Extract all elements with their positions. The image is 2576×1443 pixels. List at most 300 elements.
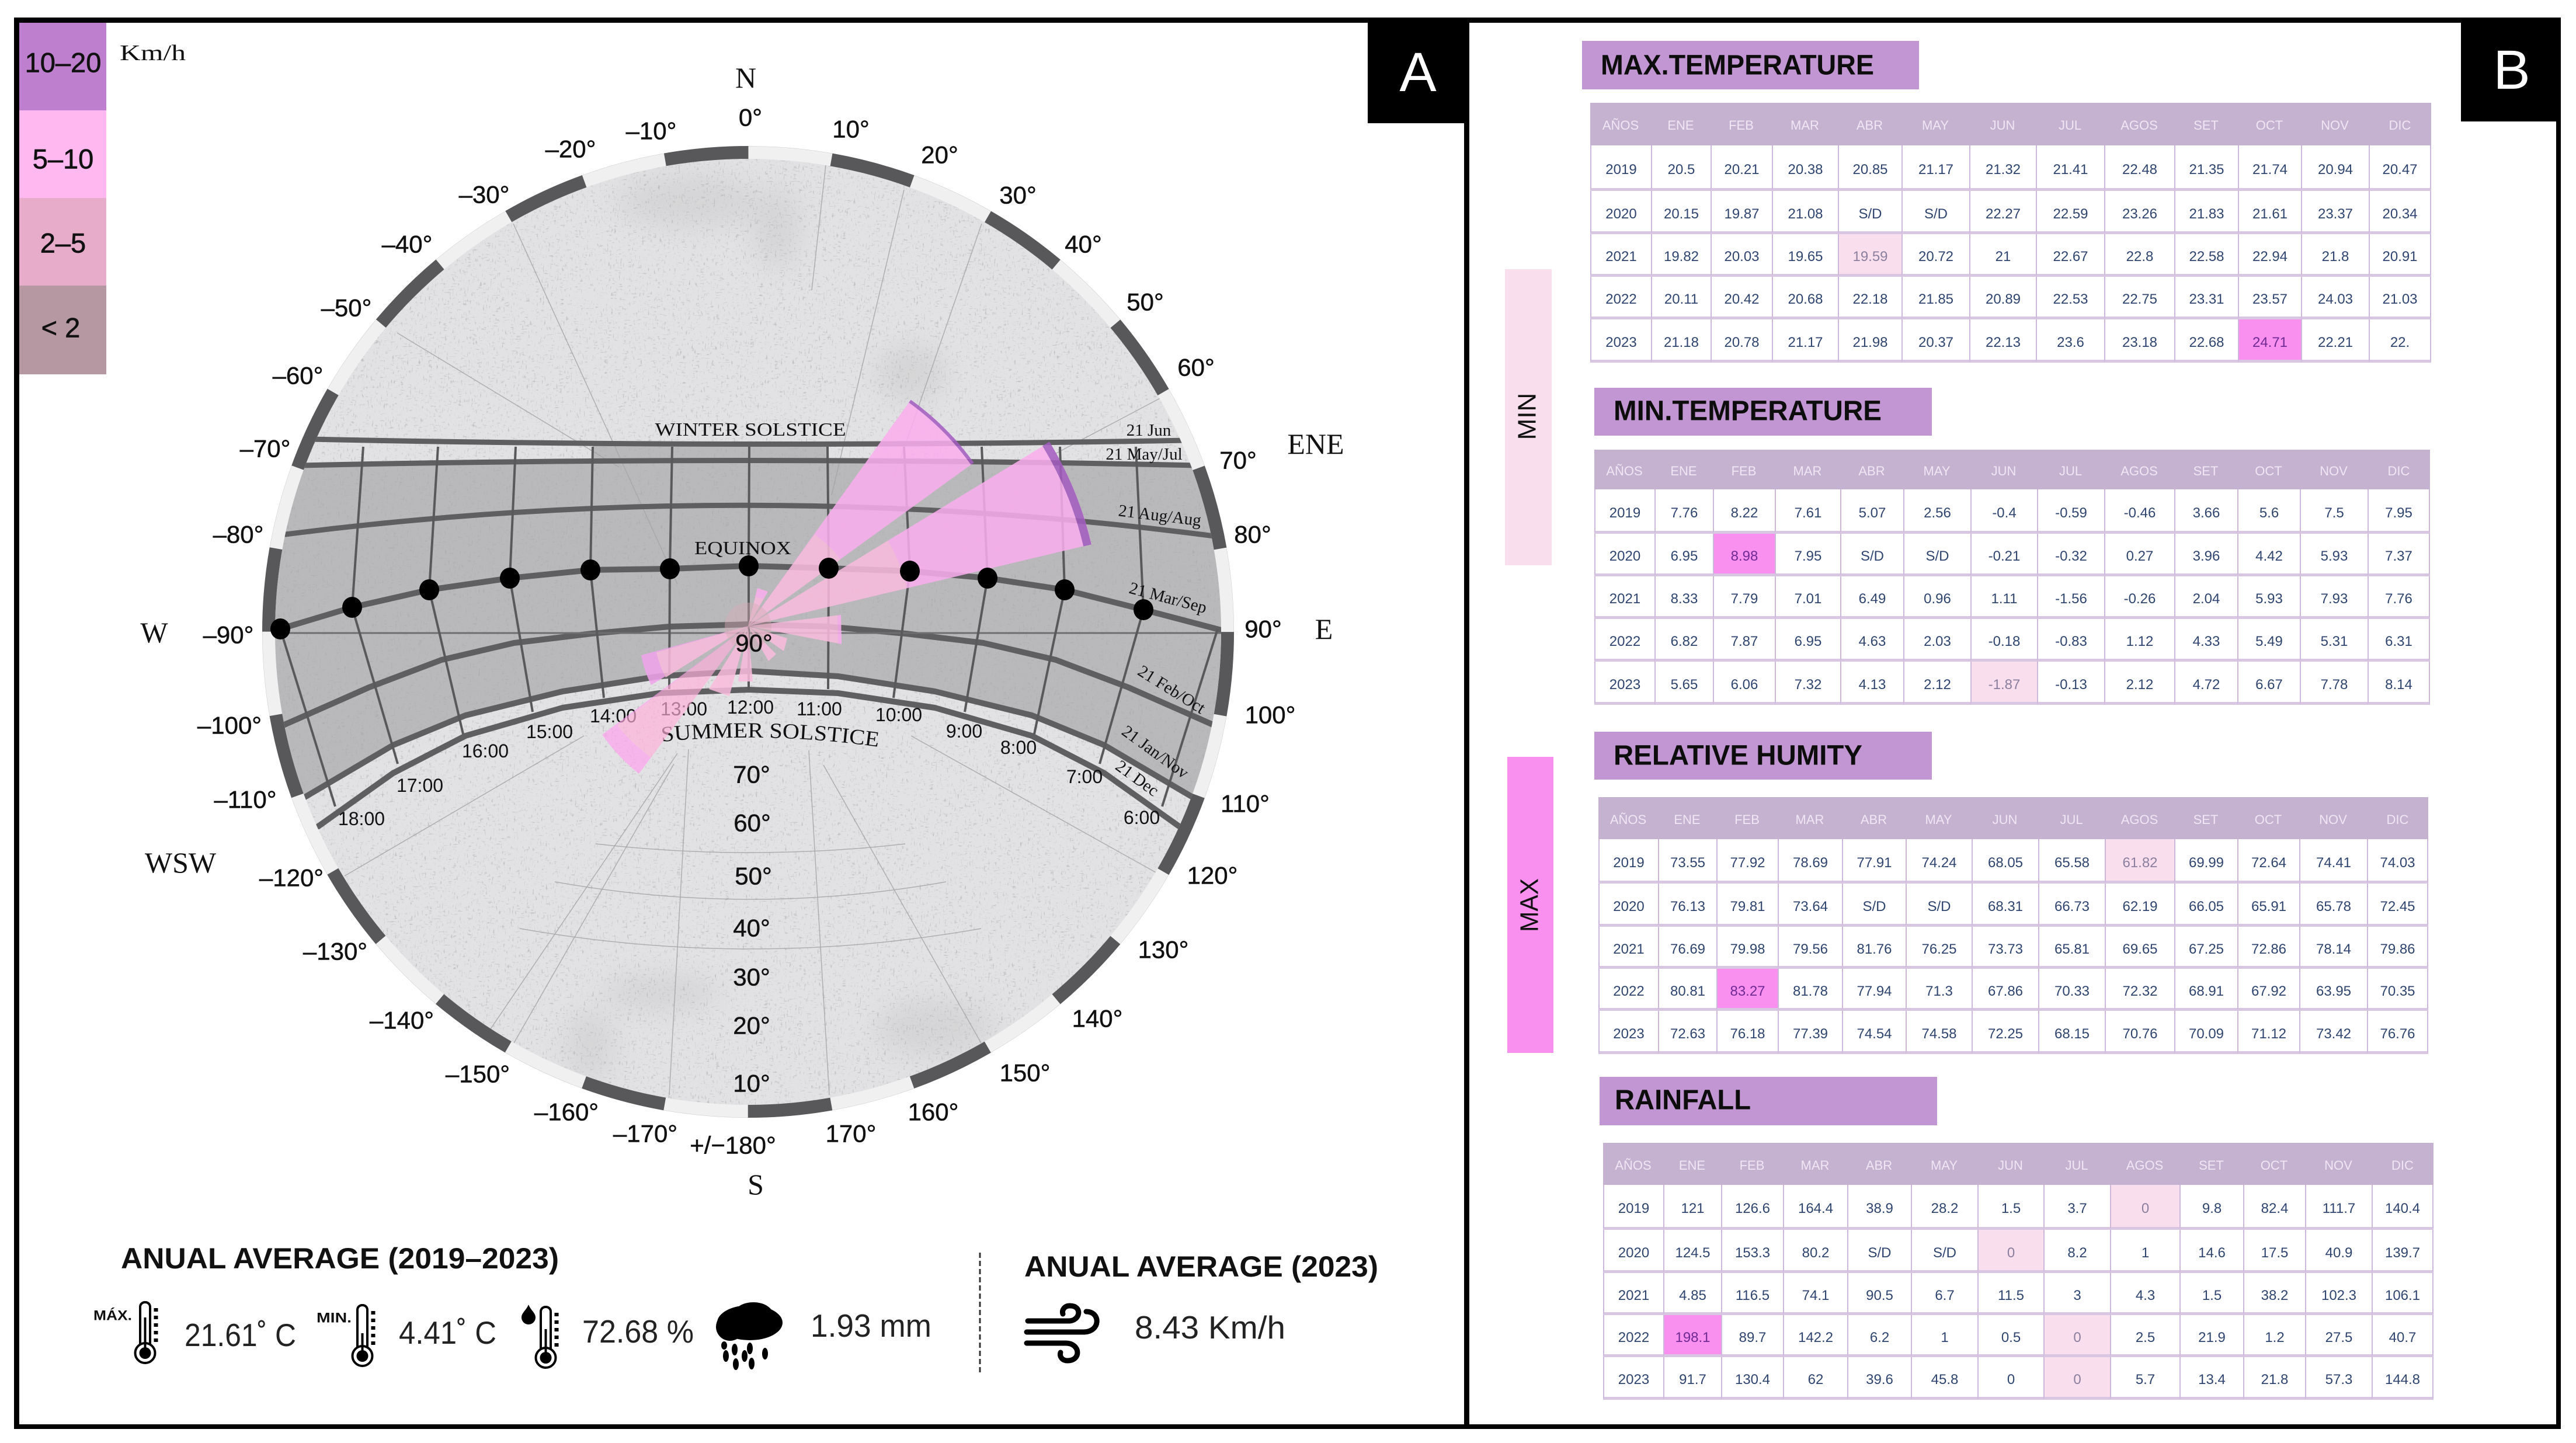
- table: min temperature: MAR: [1793, 464, 1821, 478]
- table: relative humidity: 70.76: [2122, 1025, 2158, 1042]
- table: min temperature: 5.93: [2321, 548, 2348, 564]
- map speckle: [257, 140, 1250, 1133]
- table: rainfall: 1.5: [2202, 1287, 2222, 1303]
- table: relative humidity: 74.24: [1921, 855, 1957, 870]
- degree ring: [193, 77, 1303, 1187]
- side strip: MIN: MIN: [1513, 393, 1542, 440]
- side strip: MAX: [1507, 757, 1553, 1053]
- azimuth labels: 20°: [921, 141, 958, 168]
- table: min temperature: JUL: [2059, 464, 2082, 478]
- azimuth labels: –20°: [545, 135, 596, 162]
- altitude labels: 70°: [733, 760, 770, 788]
- wind speed legend: 5–10: [33, 144, 93, 174]
- hour labels: 8:00: [1000, 737, 1037, 758]
- table: max temperature: 21.35: [2189, 161, 2224, 178]
- table: rainfall: 21.8: [2261, 1372, 2288, 1388]
- altitude labels: 20°: [733, 1011, 770, 1039]
- table: min temperature: 7.76: [1671, 505, 1698, 521]
- table: min temperature: 7.76: [2385, 591, 2412, 607]
- table: relative humidity: 76.69: [1670, 941, 1705, 957]
- table: rainfall: 28.2: [1931, 1201, 1958, 1216]
- wedge: NE upper: [748, 401, 972, 626]
- azimuth labels: 0°: [739, 104, 762, 131]
- table: min temperature: 7.78: [2321, 676, 2348, 693]
- wedge: ENE long: [748, 442, 1091, 626]
- table: min temperature: 6.95: [1795, 634, 1821, 649]
- table: relative humidity: 74.03: [2380, 855, 2415, 870]
- table: min temperature: AGOS: [2120, 464, 2158, 478]
- solstice and equinox labels: EQUINOX: [694, 537, 791, 558]
- table: relative humidity: 66.73: [2054, 898, 2090, 915]
- azimuth labels: 150°: [1000, 1059, 1050, 1086]
- table: relative humidity: 77.92: [1730, 855, 1765, 870]
- azimuth labels: –130°: [303, 938, 367, 965]
- table: min temperature: S/D: [1925, 548, 1949, 564]
- table: max temperature: 21.61: [2252, 206, 2288, 222]
- icon: rain cloud: [716, 1302, 783, 1370]
- hour labels: 12:00: [727, 697, 774, 718]
- table: relative humidity: 63.95: [2316, 983, 2351, 999]
- compass labels: E: [1315, 613, 1333, 645]
- table: max temperature: 21.18: [1664, 334, 1699, 350]
- table: rainfall: 1.2: [2265, 1329, 2285, 1345]
- wedge: SW long: [602, 626, 748, 774]
- table: min temperature: 4.72: [2193, 676, 2220, 693]
- table: max temperature: 23.18: [2122, 334, 2157, 350]
- table: relative humidity: 79.56: [1793, 941, 1828, 957]
- table: relative humidity: 67.92: [2251, 983, 2286, 999]
- date labels: 21 Aug/Aug: [1117, 501, 1202, 530]
- table: min temperature: 8.22: [1731, 505, 1758, 521]
- table: max temperature: DIC: [2389, 118, 2411, 133]
- min temperature value: 4.41˚ C: [399, 1315, 496, 1351]
- table: max temperature: S/D: [1858, 206, 1882, 222]
- table: min temperature: 4.33: [2193, 634, 2220, 649]
- table: min temperature: -0.18: [1989, 634, 2020, 649]
- table: relative humidity: 65.78: [2316, 898, 2351, 915]
- table: rainfall: MAR: [1801, 1157, 1829, 1173]
- table: rainfall: 0: [2142, 1201, 2149, 1216]
- table: max temperature: 24.03: [2318, 291, 2353, 307]
- table: rainfall: 89.7: [1739, 1329, 1766, 1345]
- table: max temperature: 22.13: [1986, 334, 2021, 350]
- altitude labels: [733, 630, 773, 1097]
- table: relative humidity: 68.05: [1988, 855, 2023, 870]
- altitude labels: 60°: [733, 809, 771, 836]
- wedge: ESE small: [748, 626, 787, 651]
- azimuth labels: –80°: [213, 521, 263, 548]
- table: relative humidity: 69.65: [2122, 941, 2158, 957]
- table: max temperature: 20.15: [1664, 206, 1699, 222]
- azimuth labels: 70°: [1219, 446, 1257, 474]
- table: relative humidity: NOV: [2319, 812, 2347, 827]
- table: rainfall: 74.1: [1802, 1287, 1829, 1303]
- table: min temperature: -1.87: [1989, 676, 2020, 693]
- table: relative humidity: 78.69: [1793, 855, 1828, 870]
- table: relative humidity: 79.81: [1730, 898, 1765, 915]
- azimuth labels: –10°: [626, 117, 676, 145]
- table: min temperature: 7.93: [2321, 591, 2348, 607]
- table: rainfall: 82.4: [2261, 1201, 2288, 1216]
- table: rainfall: 111.7: [2323, 1201, 2355, 1216]
- table: relative humidity: 70.33: [2054, 983, 2090, 999]
- altitude labels: 10°: [733, 1070, 770, 1097]
- table: relative humidity: ABR: [1861, 812, 1887, 827]
- azimuth labels: –100°: [197, 711, 262, 739]
- table: min temperature: 2.56: [1924, 505, 1951, 521]
- table: min temperature: -1.56: [2055, 591, 2087, 607]
- table: rainfall: 5.7: [2136, 1372, 2155, 1388]
- table: relative humidity: 2023: [1613, 1025, 1645, 1042]
- table: max temperature: 20.78: [1724, 334, 1760, 350]
- min label: MIN.: [317, 1310, 352, 1326]
- table: relative humidity: ENE: [1674, 812, 1701, 827]
- table: max temperature: 20.5: [1668, 161, 1695, 178]
- table: min temperature: FEB: [1732, 464, 1756, 478]
- table: min temperature: ABR: [1858, 464, 1885, 478]
- table: relative humidity: [1598, 797, 2428, 1054]
- table: relative humidity: 69.99: [2189, 855, 2224, 870]
- heading: annual average 2023: ANUAL AVERAGE (2023): [1024, 1250, 1378, 1283]
- table: max temperature: 19.59: [1852, 249, 1888, 265]
- table: rainfall: 0.5: [2001, 1329, 2021, 1345]
- table: min temperature: OCT: [2255, 464, 2282, 478]
- table: rainfall: 6.2: [1870, 1329, 1889, 1345]
- table: relative humidity: 68.31: [1988, 898, 2023, 915]
- table: min temperature: 7.87: [1731, 634, 1758, 649]
- table: relative humidity: 77.94: [1857, 983, 1892, 999]
- table: min temperature: 6.82: [1671, 634, 1698, 649]
- table: max temperature: 19.65: [1788, 249, 1823, 265]
- table: rainfall: SET: [2199, 1157, 2224, 1173]
- table: rainfall: S/D: [1868, 1245, 1891, 1260]
- azimuth labels: –160°: [534, 1098, 599, 1126]
- altitude labels: 50°: [735, 862, 772, 890]
- table: min temperature: 7.95: [1795, 548, 1821, 564]
- table: relative humidity: 70.35: [2380, 983, 2415, 999]
- table: rainfall: 3: [2073, 1287, 2081, 1303]
- table: rainfall: 80.2: [1802, 1245, 1829, 1260]
- table: max temperature: 20.37: [1918, 334, 1953, 350]
- table: max temperature: 20.89: [1986, 291, 2021, 307]
- wedge: WSW: [641, 626, 748, 685]
- table: rainfall: ENE: [1679, 1157, 1705, 1173]
- table: min temperature: JUN: [1991, 464, 2016, 478]
- title: min temperature: MIN.TEMPERATURE: [1614, 396, 1882, 426]
- table: relative humidity: 65.58: [2054, 855, 2090, 870]
- table: rainfall: 2022: [1618, 1329, 1649, 1345]
- table: max temperature: ABR: [1857, 118, 1883, 133]
- wind value: 8.43 Km/h: [1135, 1309, 1285, 1345]
- table: rainfall: 130.4: [1735, 1372, 1770, 1388]
- panel A badge: [1368, 18, 1466, 123]
- dark daytime band: [275, 463, 1221, 797]
- table: rainfall: 1.5: [2001, 1201, 2021, 1216]
- table: rainfall: 40.7: [2389, 1329, 2416, 1345]
- table: min temperature: 2023: [1609, 676, 1640, 693]
- azimuth labels: +/−180°: [690, 1132, 776, 1159]
- table: relative humidity: 2019: [1613, 855, 1645, 870]
- table: rainfall: ABR: [1866, 1157, 1892, 1173]
- table: min temperature: -0.83: [2055, 634, 2087, 649]
- table: max temperature: 23.57: [2252, 291, 2288, 307]
- altitude labels: 90°: [735, 630, 773, 656]
- table: rainfall: 38.2: [2261, 1287, 2288, 1303]
- equinox hour dots: [270, 555, 1153, 639]
- hour labels: 6:00: [1124, 807, 1160, 828]
- azimuth labels: –40°: [382, 230, 432, 258]
- table: min temperature: 8.14: [2385, 676, 2412, 693]
- azimuth labels: 50°: [1127, 288, 1164, 315]
- table: max temperature: 23.37: [2318, 206, 2353, 222]
- table: max temperature: 23.6: [2057, 334, 2084, 350]
- table: relative humidity: 67.86: [1988, 983, 2023, 999]
- table: max temperature: 21: [1996, 249, 2011, 265]
- table: min temperature: 6.67: [2255, 676, 2283, 693]
- table: relative humidity: 65.91: [2251, 898, 2286, 915]
- date labels: [1106, 421, 1209, 800]
- compass labels: WSW: [145, 846, 217, 879]
- table: max temperature: 21.08: [1788, 206, 1823, 222]
- icon: max thermometer: [135, 1302, 156, 1363]
- table: relative humidity: 79.86: [2380, 941, 2415, 957]
- table: relative humidity: 79.98: [1730, 941, 1765, 957]
- table: min temperature: 7.79: [1731, 591, 1758, 607]
- table: rainfall: 116.5: [1736, 1287, 1770, 1303]
- table: max temperature: S/D: [1924, 206, 1948, 222]
- table: rainfall: 8.2: [2067, 1245, 2087, 1260]
- sun path chart disk: [262, 146, 1234, 1118]
- azimuth labels: –110°: [214, 786, 277, 813]
- table: max temperature: [1590, 103, 2431, 363]
- side strip: MAX: MAX: [1515, 878, 1544, 932]
- table: min temperature: -0.4: [1992, 505, 2017, 521]
- azimuth labels: 130°: [1138, 936, 1188, 964]
- azimuth labels: –90°: [203, 621, 253, 648]
- table: rainfall: AÑOS: [1615, 1157, 1652, 1173]
- icon: min thermometer: [353, 1305, 373, 1366]
- table: max temperature: 22.75: [2122, 291, 2157, 307]
- wedge: S: [738, 626, 753, 681]
- table: min temperature: 7.95: [2385, 505, 2412, 521]
- table: max temperature: 22.: [2390, 334, 2410, 350]
- table: rainfall: 139.7: [2385, 1245, 2420, 1260]
- table: min temperature: -0.46: [2124, 505, 2156, 521]
- table: relative humidity: 65.81: [2054, 941, 2090, 957]
- date labels: 21 Dec: [1112, 757, 1162, 800]
- table: min temperature: NOV: [2320, 464, 2348, 478]
- compass labels: S: [748, 1168, 764, 1201]
- table: relative humidity: 71.12: [2251, 1025, 2286, 1042]
- compass labels: W: [140, 616, 168, 649]
- title: min temperature: [1594, 388, 1932, 436]
- title: rainfall: [1600, 1077, 1937, 1125]
- table: max temperature: 21.8: [2322, 249, 2349, 265]
- table: rainfall: 198.1: [1675, 1329, 1711, 1345]
- title: rainfall: RAINFALL: [1615, 1085, 1751, 1115]
- azimuth labels: [197, 104, 1295, 1159]
- table: rainfall: 1: [1941, 1329, 1949, 1345]
- table: relative humidity: 78.14: [2316, 941, 2351, 957]
- max label: MÁX.: [93, 1307, 132, 1323]
- table: max temperature: 24.71: [2252, 334, 2288, 350]
- table: max temperature: FEB: [1729, 118, 1754, 133]
- table: max temperature: 2022: [1605, 291, 1637, 307]
- table: min temperature: S/D: [1861, 548, 1884, 564]
- table: max temperature: JUL: [2059, 118, 2081, 133]
- azimuth labels: 30°: [999, 181, 1037, 209]
- table: rainfall: 9.8: [2202, 1201, 2222, 1216]
- table: min temperature: MAY: [1923, 464, 1951, 478]
- table: relative humidity: 71.3: [1925, 983, 1953, 999]
- table: max temperature: 21.98: [1852, 334, 1888, 350]
- title: max temperature: MAX.TEMPERATURE: [1601, 50, 1874, 81]
- table: min temperature: 6.06: [1731, 676, 1758, 693]
- table: rainfall: 40.9: [2325, 1245, 2352, 1260]
- table: max temperature: 20.47: [2382, 161, 2418, 178]
- solar declination curves: [269, 439, 1229, 826]
- rainfall value: 1.93 mm: [811, 1308, 931, 1344]
- table: relative humidity: 77.91: [1857, 855, 1892, 870]
- table: min temperature: 6.49: [1859, 591, 1886, 607]
- table: relative humidity: 73.73: [1988, 941, 2023, 957]
- azimuth labels: –30°: [459, 181, 509, 208]
- table: max temperature: 21.17: [1788, 334, 1823, 350]
- azimuth labels: 10°: [832, 116, 870, 142]
- table: relative humidity: OCT: [2255, 812, 2282, 827]
- table: max temperature: 2019: [1605, 161, 1637, 178]
- azimuth labels: 160°: [908, 1098, 958, 1126]
- table: rainfall: 38.9: [1866, 1201, 1893, 1216]
- table: rainfall: 3.7: [2067, 1201, 2087, 1216]
- hour labels: 16:00: [462, 740, 509, 762]
- table: min temperature: 5.07: [1859, 505, 1886, 521]
- table: max temperature: 19.87: [1724, 206, 1760, 222]
- table: rainfall: 102.3: [2321, 1287, 2356, 1303]
- azimuth labels: 60°: [1177, 354, 1215, 381]
- table: rainfall: 62: [1808, 1372, 1823, 1388]
- table: relative humidity: 74.58: [1921, 1025, 1957, 1042]
- table: rainfall: 126.6: [1735, 1201, 1770, 1216]
- date labels: 21 Jun: [1127, 421, 1171, 440]
- table: relative humidity: 2020: [1613, 898, 1645, 915]
- hour labels: 18:00: [338, 808, 385, 829]
- table: max temperature: 22.8: [2126, 249, 2153, 265]
- table: min temperature: 7.5: [2324, 505, 2344, 521]
- table: relative humidity: 68.91: [2189, 983, 2224, 999]
- map background: [275, 159, 1221, 1105]
- table: relative humidity: 81.78: [1793, 983, 1828, 999]
- table: max temperature: 21.17: [1918, 161, 1953, 178]
- dashed divider: [979, 1253, 981, 1372]
- table: min temperature: 8.33: [1671, 591, 1698, 607]
- table: rainfall: 2019: [1618, 1201, 1649, 1216]
- table: min temperature: 2021: [1609, 591, 1640, 607]
- table: relative humidity: MAR: [1796, 812, 1824, 827]
- table: min temperature: -0.32: [2055, 548, 2087, 564]
- table: min temperature: -0.13: [2055, 676, 2087, 693]
- table: min temperature: 5.93: [2255, 591, 2283, 607]
- altitude labels: 40°: [733, 915, 770, 941]
- table: relative humidity: 73.64: [1793, 898, 1828, 915]
- table: min temperature: ENE: [1670, 464, 1697, 478]
- table: min temperature: 5.49: [2255, 634, 2283, 649]
- table: min temperature: 4.13: [1859, 676, 1886, 693]
- table: relative humidity: FEB: [1734, 812, 1760, 827]
- table: rainfall: 45.8: [1931, 1372, 1958, 1388]
- azimuth labels: 90°: [1244, 616, 1282, 642]
- table: min temperature: 4.63: [1859, 634, 1886, 649]
- heading: annual average 2019-2023: ANUAL AVERAGE (2019–2023): [121, 1242, 559, 1275]
- table: relative humidity: 62.19: [2122, 898, 2158, 915]
- table: relative humidity: 83.27: [1730, 983, 1765, 999]
- table: max temperature: 22.27: [1986, 206, 2021, 222]
- azimuth labels: –150°: [446, 1060, 510, 1087]
- table: min temperature: 3.96: [2193, 548, 2220, 564]
- table: rainfall: 4.3: [2136, 1287, 2155, 1303]
- table: rainfall: 140.4: [2385, 1201, 2420, 1216]
- table: relative humidity: JUN: [1993, 812, 2017, 827]
- azimuth labels: 110°: [1221, 790, 1270, 818]
- date labels: 21 Jan/Nov: [1118, 722, 1193, 783]
- hour lines: [280, 447, 1218, 806]
- table: rainfall: 21.9: [2198, 1329, 2226, 1345]
- table: max temperature: 20.11: [1664, 291, 1698, 307]
- table: max temperature: 20.21: [1724, 161, 1760, 178]
- table: rainfall: 2023: [1618, 1372, 1649, 1388]
- icon: humidity thermometer: [522, 1305, 557, 1368]
- date labels: 21 May/Jul: [1106, 445, 1183, 464]
- table: min temperature: 2.12: [1924, 676, 1951, 693]
- altitude labels: 30°: [733, 964, 770, 990]
- table: max temperature: 22.67: [2053, 249, 2088, 265]
- panel B badge: B: [2493, 39, 2530, 101]
- table: max temperature: 21.41: [2053, 161, 2088, 178]
- table: relative humidity: 74.54: [1857, 1025, 1892, 1042]
- table: min temperature: 6.31: [2385, 634, 2412, 649]
- azimuth labels: 40°: [1065, 230, 1102, 258]
- wedge: SE small: [748, 626, 776, 661]
- wind speed legend: 2–5: [40, 228, 86, 258]
- table: max temperature: MAY: [1922, 118, 1949, 133]
- azimuth labels: –140°: [370, 1007, 434, 1034]
- table: max temperature: 20.72: [1918, 249, 1953, 265]
- legend unit: Km/h: [120, 41, 186, 65]
- table: rainfall: 57.3: [2325, 1372, 2352, 1388]
- table: rainfall: AGOS: [2126, 1157, 2163, 1173]
- table: max temperature: 22.59: [2053, 206, 2088, 222]
- table: max temperature: 2020: [1605, 206, 1637, 222]
- table: relative humidity: 70.09: [2189, 1025, 2224, 1042]
- table: max temperature: 20.85: [1852, 161, 1888, 178]
- azimuth labels: 120°: [1187, 862, 1237, 889]
- table: max temperature: OCT: [2256, 118, 2283, 133]
- table: max temperature: 21.85: [1918, 291, 1953, 307]
- table: max temperature: 22.68: [2189, 334, 2224, 350]
- table: rainfall: 124.5: [1675, 1245, 1711, 1260]
- table: max temperature: 20.34: [2382, 206, 2418, 222]
- table: relative humidity: 72.63: [1670, 1025, 1705, 1042]
- table: rainfall: 106.1: [2385, 1287, 2420, 1303]
- azimuth labels: –170°: [613, 1120, 677, 1147]
- table: relative humidity: 81.76: [1857, 941, 1892, 957]
- hour labels: 7:00: [1066, 766, 1103, 787]
- azimuth labels: 100°: [1245, 701, 1295, 729]
- table: rainfall: 27.5: [2325, 1329, 2352, 1345]
- azimuth labels: 140°: [1072, 1004, 1122, 1032]
- hour labels: 9:00: [946, 721, 982, 742]
- table: relative humidity: 72.45: [2380, 898, 2415, 915]
